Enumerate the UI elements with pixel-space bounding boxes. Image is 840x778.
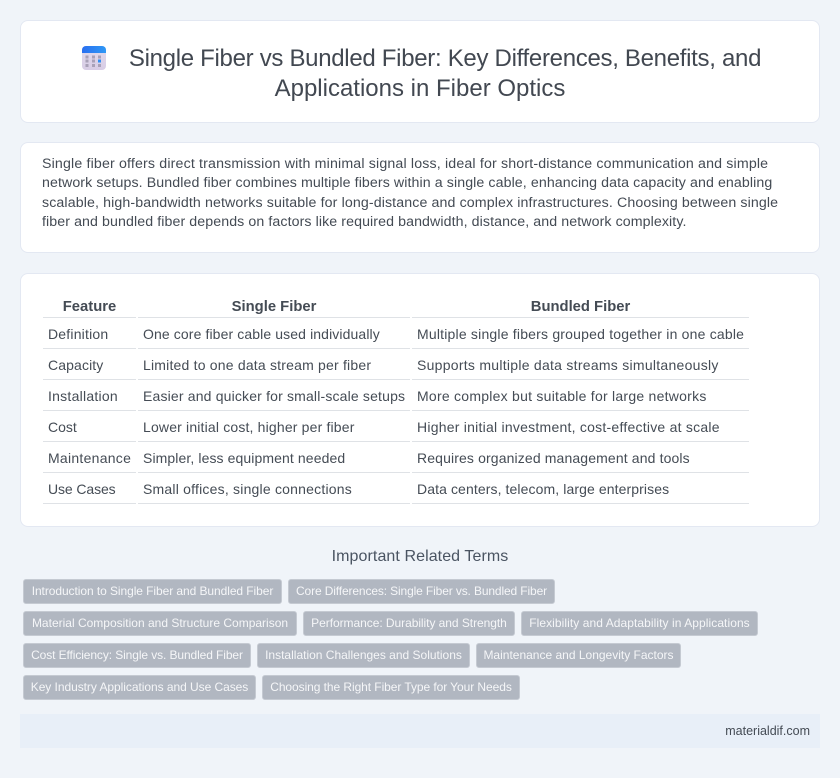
header: Single Fiber: Single Fiber [232,299,316,315]
panel: comparison table card [20,273,820,527]
footer bar [20,714,820,748]
tag [476,643,681,668]
tag: Choosing the Right Fiber Type for Your Needs [270,680,512,694]
tag [303,611,515,636]
tag: Performance: Durability and Strength [311,616,507,630]
tag: Introduction to Single Fiber and Bundled Fiber [32,584,273,598]
title [129,45,761,102]
tag: Cost Efficiency: Single vs. Bundled Fiber [31,648,243,662]
tag [288,579,555,604]
comparison table [43,299,749,504]
comparison table: Requires organized management and tools [417,450,690,466]
title: Applications in Fiber Optics [275,75,565,102]
tag [23,611,297,636]
summary text [42,156,778,230]
comparison table: Multiple single fibers grouped together in one cable [417,326,744,342]
tag: Core Differences: Single Fiber vs. Bundled Fiber [296,584,547,598]
tag: Key Industry Applications and Use Cases [31,680,248,694]
tag: Maintenance and Longevity Factors [483,648,674,662]
tag [521,611,758,636]
comparison table: Lower initial cost, higher per fiber [143,419,355,435]
comparison table: Easier and quicker for small-scale setups [143,388,405,404]
comparison table: Higher initial investment, cost-effective at scale [417,419,720,435]
tag [257,643,470,668]
icon: calendar [82,46,106,70]
summary text: fiber and bundled fiber depends on factors like required bandwidth, distance, and network complexity. [42,214,686,230]
row: Installation: Installation [48,388,118,404]
footer source text: materialdif.com [725,724,810,738]
comparison table: Limited to one data stream per fiber [143,357,371,373]
comparison table: More complex but suitable for large networks [417,388,707,404]
tag: Material Composition and Structure Comparison [32,616,288,630]
comparison table: Small offices, single connections [143,481,352,497]
header: Bundled Fiber: Bundled Fiber [531,299,630,315]
summary text: scalable, high-bandwidth networks suitable for long-distance and complex infrastructures. Choosing between single [42,195,778,211]
tag [23,643,251,668]
tag: Flexibility and Adaptability in Applications [529,616,750,630]
comparison table: Simpler, less equipment needed [143,450,345,466]
related term tags [23,579,758,700]
row: Maintenance: Maintenance [48,450,131,466]
row: Cost: Cost [48,419,77,435]
tag: Installation Challenges and Solutions [265,648,462,662]
heading: Important Related Terms: Important Related Terms [332,548,508,565]
row: Use Cases: Use Cases [48,481,116,497]
tag [262,675,520,700]
title: Single Fiber vs Bundled Fiber: Key Differences, Benefits, and [129,45,761,72]
comparison table: One core fiber cable used individually [143,326,380,342]
tag [23,579,282,604]
header: Feature: Feature [63,299,116,315]
comparison table: Data centers, telecom, large enterprises [417,481,669,497]
summary text: network setups. Bundled fiber combines multiple fibers within a single cable, enhancing data capacity and enabling [42,175,772,191]
row: Capacity: Capacity [48,357,103,373]
row: Definition: Definition [48,326,108,342]
panel: title card [20,20,820,123]
comparison table: Supports multiple data streams simultaneously [417,357,719,373]
tag [23,675,256,700]
panel: summary card [20,142,820,253]
summary text: Single fiber offers direct transmission with minimal signal loss, ideal for short-distance communication and simple [42,156,768,172]
